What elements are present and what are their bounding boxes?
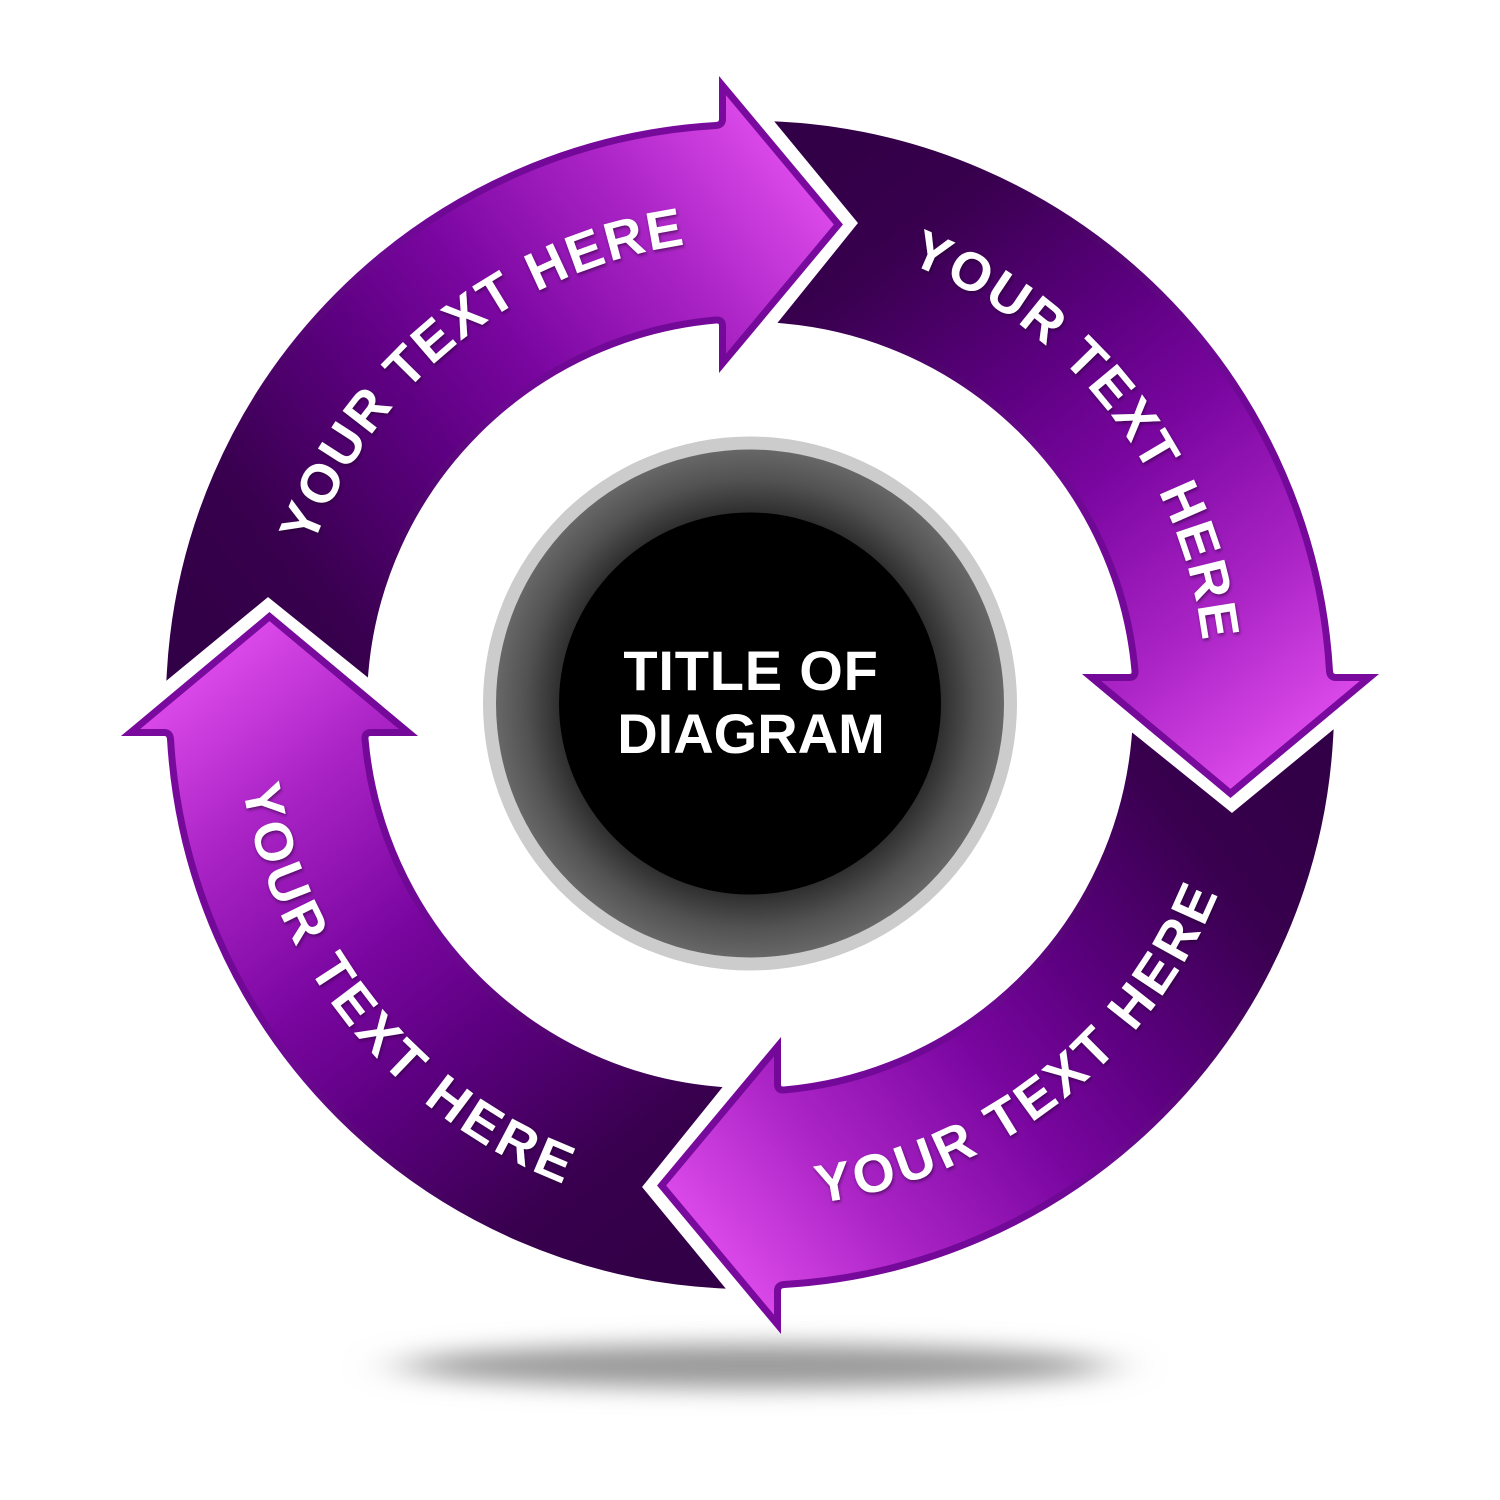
arrow: top left segment [166, 76, 843, 681]
arrow: top left segment: YOUR TEXT HERE [278, 208, 686, 534]
arrow: bottom left segment [121, 612, 726, 1289]
hub title: TITLE OF [623, 639, 879, 702]
arrow: top right segment [774, 121, 1379, 798]
hub title: DIAGRAM [617, 702, 885, 765]
arrow: bottom left segment: YOUR TEXT HERE [244, 780, 576, 1185]
arrow: top right segment: YOUR TEXT HERE [922, 229, 1242, 642]
center hub [483, 436, 1017, 970]
ground shadow [400, 1344, 1110, 1388]
arrow: bottom right segment [657, 729, 1334, 1334]
arrow: bottom right segment: YOUR TEXT HERE [813, 882, 1218, 1205]
